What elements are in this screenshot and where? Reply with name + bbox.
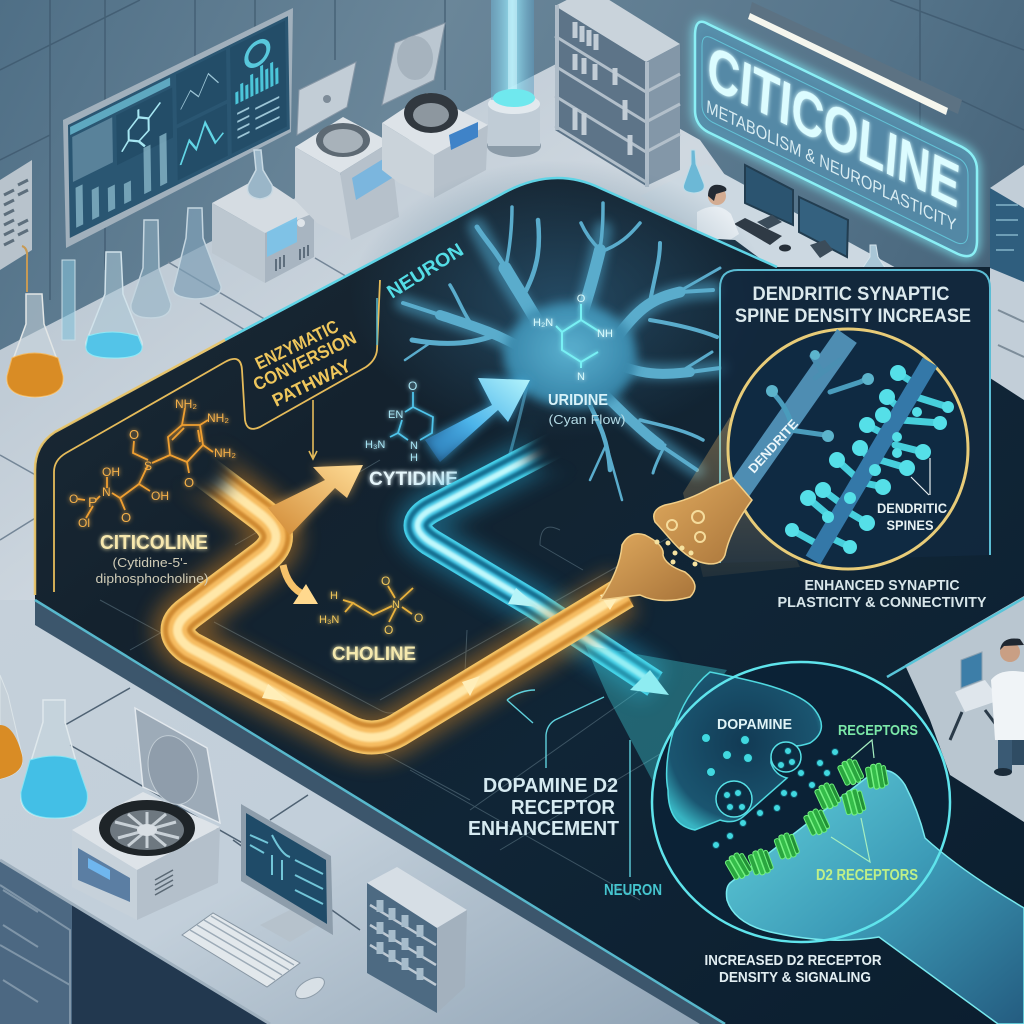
d2 labels left: DOPAMINE D2 — [483, 775, 618, 797]
flasks cluster — [7, 208, 221, 397]
neuron dendrites — [403, 203, 720, 500]
choline molecule: O — [381, 574, 390, 588]
presynaptic terminal — [654, 478, 752, 564]
d2 zoom cone — [585, 645, 727, 780]
synaptic plasticity caption: ENHANCED SYNAPTIC — [804, 577, 960, 594]
d2 magnifier — [652, 662, 1024, 1024]
neuron region sheen — [350, 160, 770, 440]
main dark board side — [35, 590, 740, 1024]
cyan flow pipeline — [418, 445, 655, 684]
choline molecule — [319, 574, 423, 637]
scientist — [961, 652, 982, 688]
citicoline molecule: O — [69, 492, 78, 506]
cytidine molecule: H₃N — [365, 439, 385, 451]
uridine label: (Cyan Flow) — [548, 412, 626, 427]
uridine molecule: O — [577, 293, 586, 305]
d2 receptors label: D2 RECEPTORS — [816, 867, 918, 884]
mouse — [292, 973, 328, 1003]
postsynaptic terminal — [600, 534, 695, 601]
spines label: DENDRITIC — [877, 500, 947, 516]
enzymatic pointer — [309, 400, 317, 459]
rear desk monitors and scientist — [683, 150, 886, 269]
plain dendrite — [739, 336, 868, 490]
uridine molecule: N — [577, 371, 585, 383]
citicoline molecule: O — [184, 475, 194, 490]
synapse zoom cone — [683, 417, 800, 577]
citicoline label: (Cytidine-5'- — [112, 555, 188, 570]
spines pointer — [911, 458, 930, 495]
citicoline molecule: O — [129, 427, 139, 442]
d2 labels left: ENHANCEMENT — [468, 818, 619, 840]
board lower edge — [35, 600, 725, 1024]
pipeline flow arrows — [262, 590, 622, 702]
gold arrow to choline — [283, 565, 318, 604]
uridine label — [548, 392, 626, 427]
enzymatic pathway label: PATHWAY — [269, 355, 354, 411]
enzymatic pathway label: ENZYMATIC — [252, 316, 342, 374]
spiny dendrite — [792, 373, 948, 547]
postsynaptic dendrite — [726, 770, 1024, 1024]
ceiling lamp — [748, 2, 962, 115]
neuron small label: NEURON — [604, 882, 662, 899]
neurotransmitter dots — [654, 540, 698, 566]
d2 receptors — [724, 757, 889, 882]
dendritic heading: DENDRITIC SYNAPTIC — [752, 284, 950, 305]
choline molecule: N — [392, 599, 400, 611]
citicoline label — [96, 532, 208, 586]
choline label: CHOLINE — [332, 644, 416, 665]
neuron dendrite halo — [403, 227, 720, 470]
d2 caption: DENSITY & SIGNALING — [719, 969, 871, 986]
citicoline label: diphosphocholine) — [96, 571, 208, 586]
centrifuge right — [382, 23, 488, 198]
citicoline molecule: P — [88, 494, 97, 510]
right floor with scientist — [887, 596, 1024, 822]
citicoline molecule: O — [121, 510, 131, 525]
dopamine dots — [702, 734, 838, 848]
dopamine label: DOPAMINE — [717, 716, 792, 733]
receptors label: RECEPTORS — [838, 722, 918, 739]
rear workbench — [640, 164, 900, 270]
board cyan edge — [225, 178, 777, 340]
dendrite magnifier — [728, 329, 968, 569]
spines label: SPINES — [886, 517, 934, 533]
centrifuge middle — [295, 62, 399, 240]
uridine molecule: H₂N — [533, 317, 553, 329]
counter seams — [65, 688, 360, 930]
cytidine molecule: H — [410, 452, 418, 464]
synaptic plasticity caption: PLASTICITY & CONNECTIVITY — [778, 594, 986, 611]
choline molecule: H₃N — [319, 614, 339, 626]
dendritic panel — [720, 270, 990, 563]
enzymatic pathway label: CONVERSION — [250, 328, 359, 395]
vesicle pockets — [716, 742, 801, 817]
d2 labels left: RECEPTOR — [511, 797, 616, 819]
uridine molecule: NH — [597, 328, 613, 340]
small shelf unit — [367, 867, 467, 1013]
neuron soma — [504, 302, 637, 408]
cytidine label: CYTIDINE — [369, 469, 458, 490]
citicoline molecule — [69, 397, 236, 530]
big cyan arrow — [425, 378, 530, 462]
main dark board — [35, 178, 1024, 1024]
presynaptic terminal — [667, 672, 821, 830]
receptor pointers — [831, 740, 874, 862]
small incubator — [212, 150, 314, 283]
wall notes panel — [0, 160, 32, 270]
neuron label: NEURON — [384, 240, 468, 303]
citicoline molecule: NH₂ — [207, 411, 229, 425]
front centrifuge — [72, 708, 220, 920]
cytidine molecule: O — [408, 379, 417, 393]
citicoline molecule: OH — [102, 465, 120, 479]
uridine label: URIDINE — [548, 392, 608, 409]
cytidine molecule — [365, 379, 433, 464]
cyan flow arrowheads — [508, 588, 669, 695]
inner gold outline — [54, 280, 380, 592]
choline molecule: H — [330, 590, 338, 602]
d2 pointer lines — [507, 690, 630, 877]
citicoline molecule: NH₂ — [214, 446, 236, 460]
counter tile lines — [0, 258, 395, 640]
board gold edge — [35, 340, 225, 595]
right cabinet — [990, 165, 1024, 400]
synaptic plasticity caption — [778, 577, 986, 611]
gold synapse — [600, 478, 752, 601]
title sign — [695, 22, 977, 256]
gold arrow to cytidine — [268, 465, 363, 535]
citicoline molecule: Ol — [78, 516, 90, 530]
lower lab counter — [0, 600, 725, 1024]
front monitor — [241, 804, 333, 942]
dendritic heading: SPINE DENSITY INCREASE — [735, 306, 971, 327]
dendritic heading — [735, 284, 971, 327]
board divider line — [376, 298, 378, 345]
citicoline molecule: S — [144, 459, 152, 473]
front flasks — [0, 675, 87, 818]
citicoline molecule: N — [102, 485, 111, 499]
d2 labels left — [468, 775, 619, 840]
neuron — [403, 203, 720, 500]
keyboard — [182, 913, 300, 987]
citicoline molecule: OH — [151, 489, 169, 503]
choline molecule: O — [414, 611, 423, 625]
subtitle text: METABOLISM & NEUROPLASTICITY — [706, 97, 957, 236]
wall monitor — [63, 8, 293, 248]
choline molecule: O — [384, 623, 393, 637]
spines label — [877, 500, 947, 533]
d2 caption: INCREASED D2 RECEPTOR — [704, 952, 882, 969]
bench cabinets — [0, 860, 270, 1024]
cytidine molecule: EN — [388, 409, 403, 421]
citicoline label: CITICOLINE — [100, 532, 208, 554]
d2 caption — [704, 952, 882, 986]
cytidine molecule: N — [410, 440, 418, 452]
dendrite label: DENDRITE — [745, 416, 801, 476]
citicoline molecule: NH₂ — [175, 397, 197, 411]
gold pipeline — [178, 468, 625, 738]
board faint grid — [100, 460, 700, 900]
lab counter top — [0, 62, 800, 680]
storage shelf — [555, 0, 680, 187]
glowing cylinder — [487, 0, 541, 157]
uridine molecule — [533, 293, 613, 383]
